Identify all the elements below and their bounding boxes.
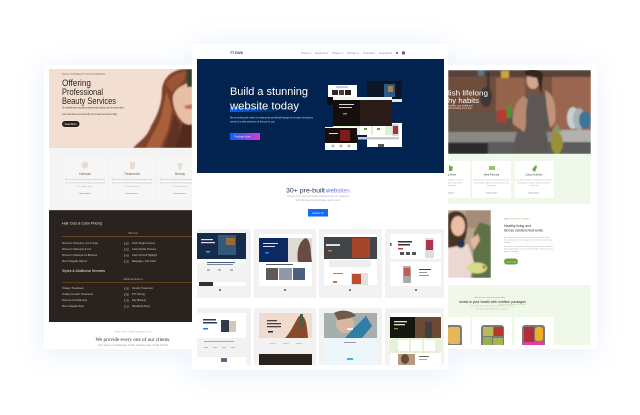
service text: every day	[530, 185, 538, 187]
hero button	[230, 133, 260, 140]
service text: helping you improve heart and health	[518, 182, 550, 184]
service titles: Haircuts	[79, 172, 91, 176]
hero heading: lish lifelong	[448, 88, 488, 98]
hero body text	[62, 106, 124, 116]
packages band: Achieve your long-term goals today	[475, 296, 506, 299]
template thumbnails	[197, 229, 444, 365]
section heading	[286, 188, 351, 194]
hero text: We are leading the market in creating fast and flexible designs for all types of business	[230, 116, 314, 120]
packages heading: Invest in your health with nutrition packages	[459, 300, 526, 304]
service links	[79, 192, 187, 195]
thumbnail 4	[385, 229, 444, 298]
hero text: needs & a wide selection of demos for you	[230, 120, 276, 124]
thumbnail 8	[385, 308, 444, 365]
service text: in a unique place	[172, 186, 189, 188]
photo: woman with red hair	[133, 69, 192, 148]
hero text: feel amazing every day	[448, 107, 472, 110]
pricing rows: Women's Shampoo, Cut & Style	[62, 242, 99, 245]
services rows	[62, 287, 153, 308]
service titles	[79, 172, 185, 176]
clients heading: We provide every one of our clients.	[96, 336, 170, 343]
panel: center main template	[192, 44, 448, 370]
service text: We help you create a meal plan to reach	[474, 178, 509, 182]
hero heading	[62, 78, 116, 106]
pricing rows: $ 62	[124, 242, 129, 246]
service text: Our fitness plans are made for everyone	[516, 178, 553, 182]
section text	[287, 195, 350, 202]
thumbnail 1	[197, 229, 251, 298]
services rows: $ 25	[124, 300, 129, 302]
service text: every day	[487, 185, 496, 187]
clients caption: WHAT OUR CLIENTS SAY ABOUT US	[114, 330, 152, 334]
services rows: Todays Keratin Treatment	[62, 293, 93, 296]
health text: today	[504, 241, 511, 244]
pricing rows: Balayage + Full Color	[132, 260, 156, 263]
logo: TT DIVA	[230, 51, 243, 55]
health text: Our plans are simple and built for your lifestyle and goals	[504, 245, 553, 248]
pricing rows: Color Double Process	[132, 248, 157, 251]
thumbnail 2	[254, 229, 316, 298]
services rows: PH Toning	[132, 293, 146, 296]
service text: that cater to clients of all ages and lifestyles	[160, 182, 200, 184]
health button	[504, 258, 518, 264]
hero button	[62, 121, 80, 127]
service links: Learn ›	[448, 192, 455, 194]
panel: left beauty template	[44, 65, 201, 349]
health text: with support from coaches and friendly nutrition experts	[504, 248, 553, 250]
service links	[448, 192, 540, 194]
hero text	[230, 116, 314, 124]
thumbnail 3	[319, 229, 382, 298]
service text: plan for your life	[448, 182, 463, 184]
pricing rows: $ 52	[124, 248, 129, 252]
pricing rows: Women's Shampoo & Blowout	[62, 254, 97, 257]
pricing rows: $ 32	[124, 260, 129, 264]
hero heading: hy habits	[448, 96, 479, 105]
service titles: Treatments	[124, 172, 140, 176]
collage of site screenshots	[325, 81, 402, 150]
hero button: Purchase Now ›	[234, 136, 252, 138]
pricing rows: Men's Regular Haircut	[62, 260, 87, 263]
health heading	[504, 224, 543, 232]
pricing section	[49, 210, 192, 322]
services rows: Keratin Treatment	[132, 287, 153, 290]
service titles: Beauty	[175, 172, 185, 176]
hero heading: website today	[229, 100, 300, 112]
panel: right health template	[445, 65, 597, 350]
pricing rows	[62, 242, 157, 264]
service text	[448, 178, 553, 187]
beauty hero	[49, 69, 192, 148]
photo: woman with salad	[448, 210, 491, 278]
section button	[308, 209, 328, 216]
service text: We are a sanctuary of beauty and grooming	[65, 178, 106, 181]
shot: top left	[328, 85, 357, 97]
hero heading	[448, 90, 488, 104]
service links: Learn more ›	[174, 192, 187, 195]
pricing heading: Hair Cuts & Color Pricing	[62, 222, 102, 226]
services rows: Express Conditioning	[62, 299, 88, 302]
services heading: Styles & Additional Services	[62, 269, 105, 273]
service text: Build an exercise	[448, 180, 464, 182]
meal cards	[448, 317, 554, 345]
menu: Pages ▾	[332, 52, 343, 55]
section heading: 30+ pre-built	[286, 188, 325, 194]
section heading: websites	[325, 188, 351, 194]
service titles: Meal Planning	[484, 174, 500, 176]
icons	[82, 162, 183, 170]
health caption: HEALTHY LIVING GUIDE	[504, 218, 530, 220]
pricing section: Hair Cuts	[128, 232, 139, 235]
shot: top right	[367, 81, 402, 102]
thumbnail 6	[254, 308, 316, 365]
service links: Learn more ›	[126, 192, 139, 195]
packages band	[446, 285, 591, 350]
shot: bottom left	[325, 127, 357, 150]
pricing rows: Color Single Process	[132, 242, 156, 245]
menu: Shop ▾	[347, 52, 359, 55]
service text: We are a sanctuary of beauty and grooming	[160, 178, 201, 181]
service titles: g Plans	[448, 174, 457, 176]
health text: that will improve your energy and mood every single day	[504, 238, 553, 242]
health button: Learn more	[506, 260, 517, 263]
packages band: with balanced nutrition for every goal	[476, 308, 509, 310]
services rows: $ 22	[124, 306, 129, 308]
hero heading: Offering	[62, 78, 91, 88]
service titles	[448, 174, 543, 176]
hero heading	[229, 86, 308, 112]
service text: We are a sanctuary of beauty and grooming	[112, 178, 153, 181]
icons: search and flag	[396, 52, 405, 54]
background glow	[40, 42, 598, 377]
hero text	[448, 104, 472, 110]
shot: bottom right	[358, 123, 402, 147]
service links: Learn more ›	[528, 192, 540, 194]
services rows: Todays Treatment	[62, 287, 84, 290]
health heading: Healthy living and	[504, 224, 531, 228]
service links: Learn more ›	[486, 192, 498, 194]
service text: that cater to clients of all ages and lifestyles	[65, 182, 105, 184]
services band	[448, 154, 591, 204]
hero heading: Professional	[62, 87, 103, 97]
section text: Choose from over 30 unique websites that are designed	[287, 195, 350, 198]
section text: with the latest technologies and trends	[296, 199, 341, 202]
menu: Contact	[363, 52, 375, 55]
service text	[65, 178, 201, 188]
hero body text: Look and feel your best with our trusted services today	[62, 112, 118, 116]
panel: left beauty template: Our team is dedicated to the beauty care of all clients	[98, 344, 169, 347]
menu: Support	[379, 52, 393, 55]
services section	[49, 148, 201, 210]
services rows: Wedding Party	[132, 305, 151, 308]
menu: Home ▾	[301, 52, 311, 55]
pricing rows: Women's Shampoo & Cut	[62, 248, 91, 251]
services rows: $ 35	[124, 288, 129, 290]
hero heading: Build a stunning	[230, 86, 308, 98]
hero text: improve your health and	[448, 104, 473, 108]
pricing rows: Color Foil Full Highlight	[132, 254, 157, 257]
service text: in a unique place	[124, 186, 141, 188]
hero caption: MAKE YOUR BEAUTY SALON PREMIUM	[62, 73, 105, 76]
main hero	[197, 59, 444, 173]
services rows: $ 85	[124, 294, 129, 296]
menu: Features ▾	[315, 52, 328, 55]
health text: join us today	[503, 250, 519, 253]
menu	[301, 52, 393, 55]
thumbnail 7	[319, 308, 382, 365]
service text: and goals	[448, 185, 457, 187]
hero button: Read More	[65, 123, 77, 126]
thumbnail 5	[197, 308, 251, 365]
nav bar	[230, 51, 405, 55]
hero heading: Beauty Services	[62, 96, 116, 106]
services rows: Men's Regular Style	[62, 305, 85, 308]
section button: Explore All	[313, 212, 324, 215]
hero body text: Our skilled team provides professional beauty care for every client	[62, 106, 124, 110]
service text: your health and fitness goals with ease	[474, 182, 510, 184]
icons	[449, 165, 537, 172]
health text	[503, 236, 553, 253]
pricing rows: $ 42	[124, 254, 129, 258]
service links: Learn more ›	[79, 192, 92, 195]
pricing section: Additional Services	[123, 278, 144, 281]
shot: main	[327, 97, 392, 135]
photo: woman in kitchen	[448, 69, 591, 154]
service text: in a unique place	[77, 186, 94, 188]
packages band: Our meals are prepared fresh and delivered to you	[470, 304, 514, 308]
service text: that cater to clients of all ages and lifestyles	[112, 182, 152, 184]
service titles: Cardio Activities	[525, 174, 543, 176]
health text: A healthy diet and regular exercise bring benefits to life	[504, 236, 551, 239]
health heading: fat loss solutions that works	[504, 228, 543, 232]
services rows: Day Makeup	[132, 299, 147, 302]
